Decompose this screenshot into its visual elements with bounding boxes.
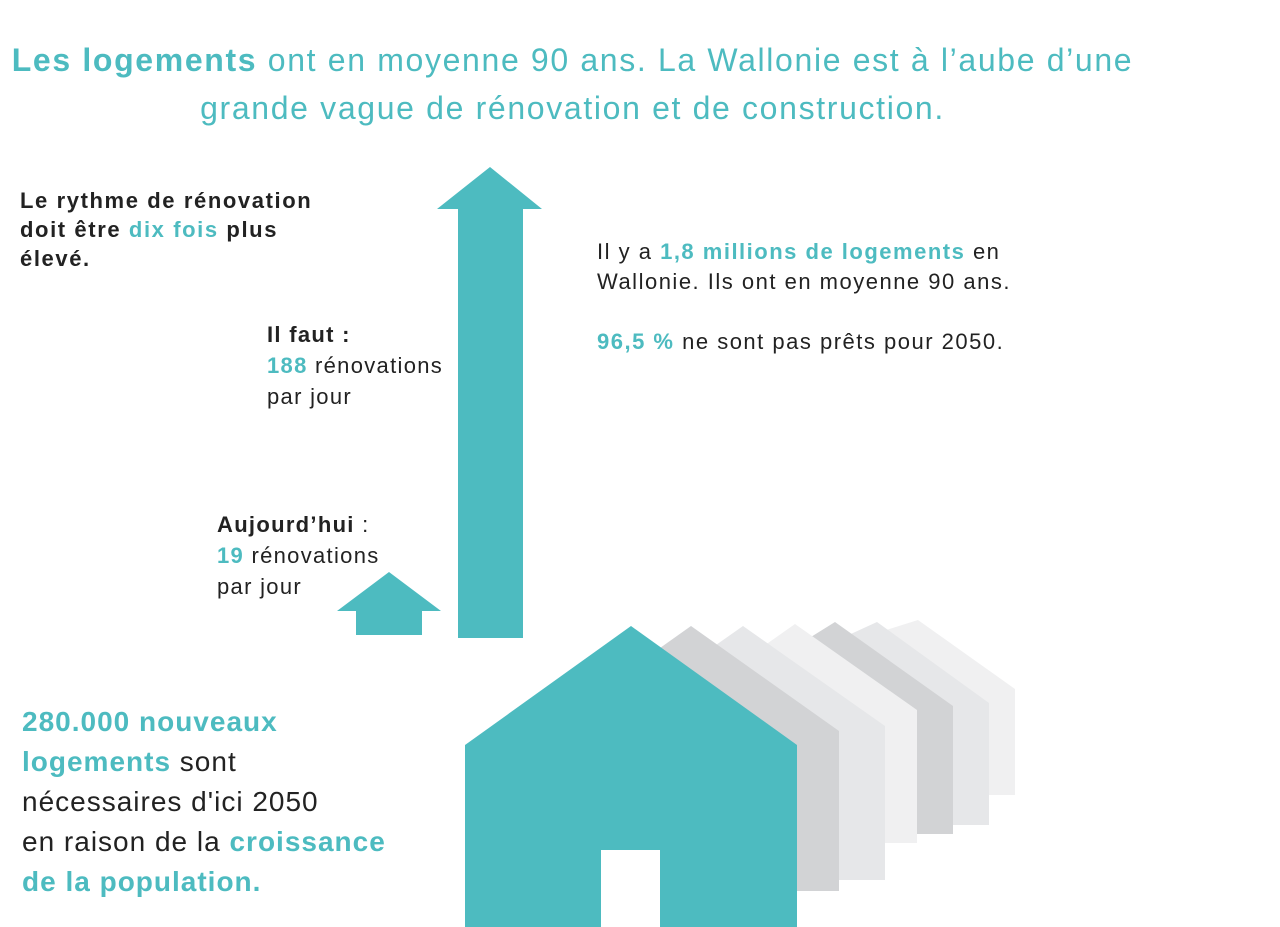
text: il faut: par jour: [267, 384, 352, 409]
title: grande vague de rénovation et de construction.: [200, 90, 945, 126]
icon: small arrow: [337, 572, 441, 635]
text: nouveaux logements: de la population.: [22, 866, 261, 897]
text: nouveaux logements: en raison de la croissance: [22, 826, 386, 857]
text: nouveaux logements: [22, 706, 386, 897]
text: stats: Wallonie. Ils ont en moyenne 90 ans.: [597, 269, 1011, 294]
text: nouveaux logements: logements sont: [22, 746, 237, 777]
text: aujourd'hui: par jour: [217, 574, 302, 599]
houses: [465, 620, 1015, 927]
icon: main house: [465, 626, 797, 927]
text: rythme: Le rythme de rénovation: [20, 188, 312, 213]
text: rythme: [20, 188, 312, 271]
text: stats: Il y a 1,8 millions de logements en: [597, 239, 1000, 264]
text: stats: 96,5 % ne sont pas prêts pour 2050.: [597, 329, 1004, 354]
text: nouveaux logements: nécessaires d'ici 2050: [22, 786, 319, 817]
text: aujourd'hui: 19 rénovations: [217, 543, 380, 568]
text: rythme: doit être dix fois plus: [20, 217, 278, 242]
title: [12, 42, 1133, 126]
icon: big arrow: [437, 167, 542, 638]
text: il faut: 188 rénovations: [267, 353, 443, 378]
text: rythme: élevé.: [20, 246, 91, 271]
text: il faut: [267, 322, 443, 409]
title: Les logements ont en moyenne 90 ans. La Wallonie est à l’aube d’une: [12, 42, 1133, 78]
text: stats: [597, 239, 1011, 354]
text: nouveaux logements: 280.000 nouveaux: [22, 706, 278, 737]
text: il faut: Il faut :: [267, 322, 351, 347]
text: aujourd'hui: Aujourd’hui :: [217, 512, 370, 537]
text: aujourd'hui: [217, 512, 380, 599]
